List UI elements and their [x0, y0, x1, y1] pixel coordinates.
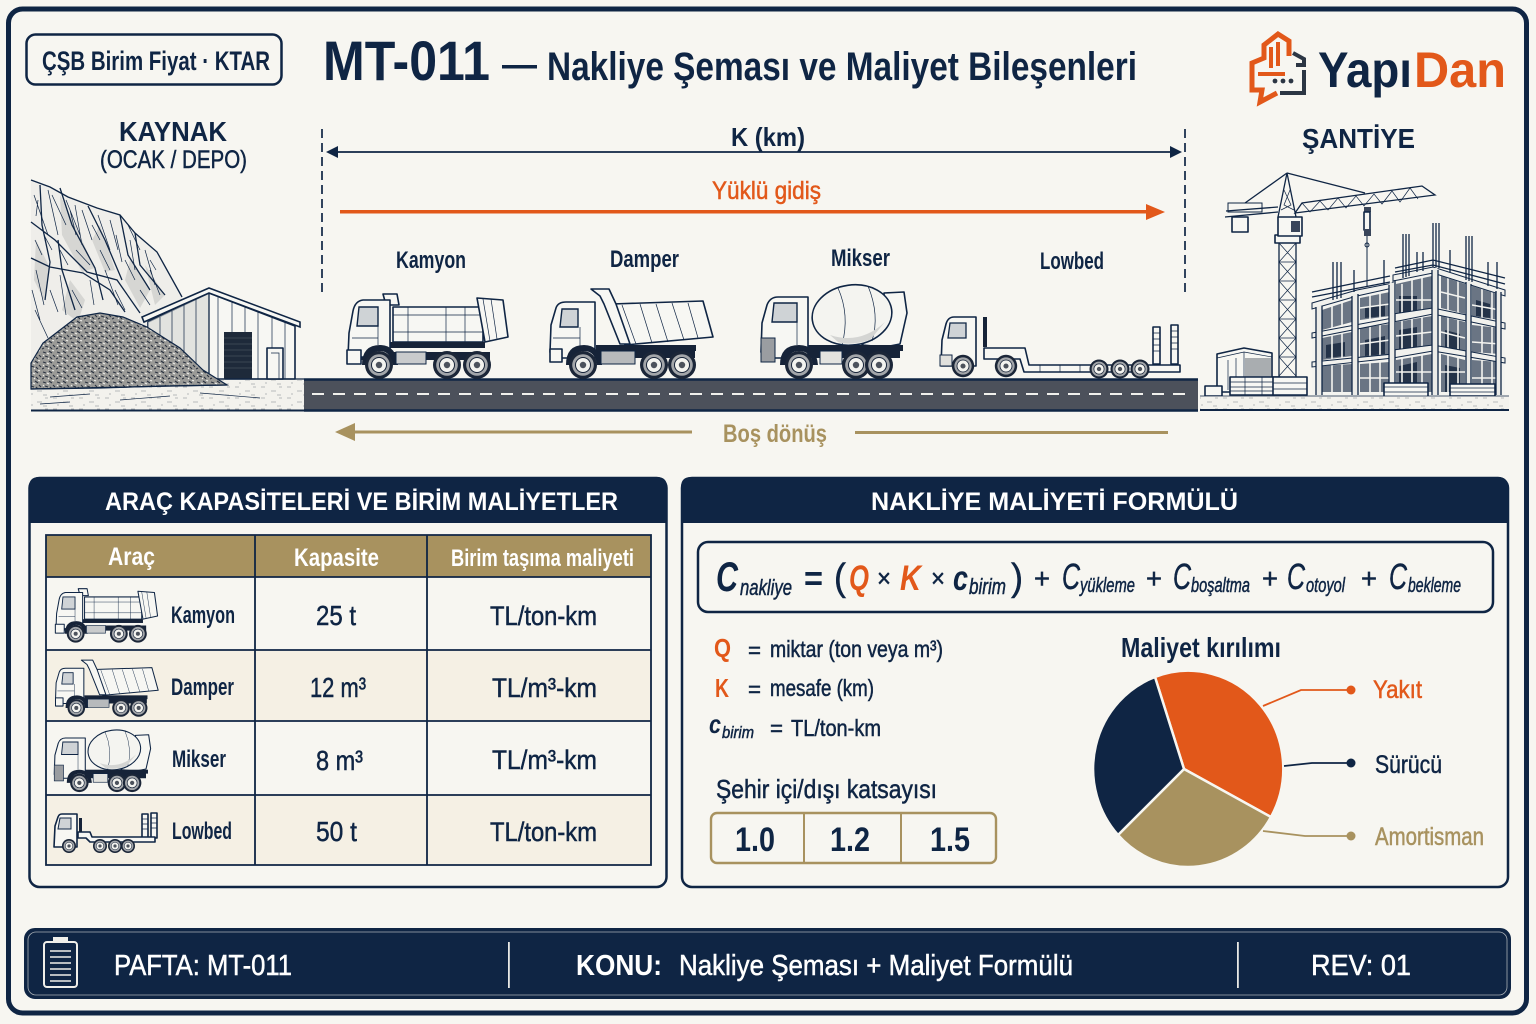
depot building [142, 288, 300, 379]
badge: ÇŞB Birim Fiyat: ÇŞB Birim Fiyat · KTAR [42, 46, 270, 76]
formula box: C [716, 553, 738, 600]
table [46, 535, 651, 865]
title: Nakliye Şeması ve Maliyet Bileşenleri [547, 45, 1137, 89]
row: Lowbed: TL/ton-km [490, 817, 597, 847]
vehicle: Mikser: Mikser [831, 245, 890, 272]
variable definitions: c [709, 709, 721, 739]
formula box: bekleme [1408, 575, 1461, 597]
row: Damper: 12 m³ [310, 672, 366, 703]
row: Damper: Damper [171, 674, 234, 701]
formula box: C [1062, 556, 1081, 597]
vehicle: Mikser [761, 245, 907, 379]
row: Lowbed: Lowbed [172, 818, 232, 845]
logo: YapıDan: Dan [1414, 42, 1506, 98]
row: Kamyon [55, 589, 597, 643]
variable definitions [709, 633, 943, 742]
legend: Yakıt [1263, 676, 1422, 706]
panel header [29, 477, 667, 523]
formula box: × [877, 563, 891, 593]
formula box: ) [1011, 557, 1023, 599]
variable definitions: Q [714, 633, 731, 663]
formula box: Q [849, 559, 869, 598]
legend: Sürücü [1284, 751, 1442, 779]
variable definitions: = [770, 716, 783, 741]
badge: ÇŞB Birim Fiyat [26, 34, 282, 84]
vehicle: Kamyon: Kamyon [396, 247, 466, 274]
row: Kamyon: Kamyon [171, 602, 235, 629]
formula box: birim [969, 574, 1006, 599]
variable definitions: TL/ton-km [791, 715, 881, 741]
row: Damper: TL/m³-km [492, 673, 597, 703]
footer: subject: Nakliye Şeması + Maliyet Formülü [679, 950, 1073, 982]
footer bar [25, 929, 1510, 998]
row: Damper [55, 660, 597, 717]
panel header [681, 477, 1508, 523]
row: Kamyon: 25 t [316, 600, 356, 631]
icon: clipboard [44, 938, 77, 987]
variable definitions: = [748, 638, 761, 663]
panel: vehicle capacities and unit costs [29, 477, 667, 887]
formula box: + [1361, 563, 1377, 594]
vehicle: Lowbed [940, 248, 1180, 379]
legend: Sürücü: Sürücü [1375, 751, 1442, 779]
row: Mikser [54, 727, 597, 792]
variable definitions: mesafe (km) [770, 675, 874, 701]
vehicle: Damper [550, 246, 713, 379]
variable definitions: K [715, 673, 729, 703]
subheading: ocak / depo: (OCAK / DEPO) [100, 146, 247, 174]
dimension: K (km) [322, 122, 1185, 292]
formula box: C [1389, 556, 1408, 597]
urban / rural coefficient: 1.0 [735, 821, 775, 859]
tower crane [1225, 173, 1435, 378]
footer: subject: KONU: [576, 950, 662, 982]
formula box: nakliye [740, 575, 792, 600]
urban / rural coefficient: 1.2 [830, 821, 870, 859]
panel header: NAKLİYE MALİYETİ FORMÜLÜ [871, 487, 1238, 516]
formula box [698, 542, 1493, 612]
table header [108, 543, 634, 572]
row: Mikser: TL/m³-km [492, 745, 597, 775]
legend: Amortisman [1263, 823, 1484, 851]
vehicle: Lowbed: Lowbed [1040, 248, 1104, 275]
formula box: + [1262, 563, 1278, 594]
title: MT-011 [323, 29, 490, 92]
formula box: otoyol [1306, 575, 1345, 597]
row: Lowbed: 50 t [316, 816, 357, 847]
logo: YapıDan: Yapı [1318, 42, 1412, 98]
formula box: + [1034, 563, 1050, 594]
row: Kamyon: TL/ton-km [490, 601, 597, 631]
formula box: = [804, 560, 823, 598]
gravel pile [31, 313, 227, 389]
row: Mikser: 8 m³ [316, 745, 363, 776]
site hut and material stacks [1205, 348, 1495, 397]
pie chart: cost breakdown: Maliyet kırılımı [1121, 632, 1281, 663]
legend: Amortisman: Amortisman [1375, 823, 1484, 851]
formula box: yükleme [1079, 575, 1135, 597]
urban / rural coefficient: 1.5 [930, 821, 970, 859]
formula box: C [1173, 556, 1192, 597]
urban / rural coefficient: Şehir içi/dışı katsayısı [716, 774, 937, 804]
variable definitions: birim [722, 723, 754, 742]
title [323, 29, 1137, 92]
panel: transport cost formula [681, 477, 1508, 887]
formula box: c [953, 559, 968, 598]
arrow: empty return [335, 420, 1168, 448]
arrow: empty return: Boş dönüş [723, 420, 827, 448]
vehicle: Damper: Damper [610, 246, 679, 273]
vehicle: Kamyon [347, 247, 508, 379]
row: Mikser: Mikser [172, 746, 226, 773]
formula box: K [900, 559, 923, 598]
building frame [1312, 223, 1505, 395]
legend: Yakıt: Yakıt [1373, 676, 1422, 704]
formula box: ( [834, 557, 846, 599]
variable definitions: miktar (ton veya m³) [770, 636, 943, 662]
footer: sheet number: PAFTA: MT-011 [114, 950, 292, 982]
formula box: + [1146, 563, 1162, 594]
road [304, 379, 1198, 411]
table header: Birim taşıma maliyeti [451, 545, 634, 572]
formula box: boşaltma [1191, 575, 1250, 597]
urban / rural coefficient [711, 774, 996, 863]
variable definitions: = [748, 677, 761, 702]
formula box: × [931, 563, 945, 593]
row: Lowbed [54, 813, 597, 853]
illustration: construction site with crane [1200, 173, 1509, 410]
table header: Kapasite [294, 544, 379, 572]
heading: ŞANTİYE: ŞANTİYE [1302, 123, 1415, 154]
arrow: loaded trip: Yüklü gidiş [712, 177, 821, 205]
panel header: ARAÇ KAPASİTELERİ VE BİRİM MALİYETLER [105, 488, 618, 516]
heading: KAYNAK: KAYNAK [119, 116, 227, 147]
formula box: C [1287, 556, 1306, 597]
logo: YapıDan [1252, 34, 1506, 102]
footer: revision: REV: 01 [1311, 950, 1411, 982]
illustration: quarry, gravel pile and depot [31, 180, 304, 410]
pie chart: cost breakdown [1093, 632, 1484, 867]
table header: Araç [108, 543, 155, 571]
dimension: K (km): K (km) [731, 122, 805, 152]
arrow: loaded trip [340, 177, 1165, 220]
